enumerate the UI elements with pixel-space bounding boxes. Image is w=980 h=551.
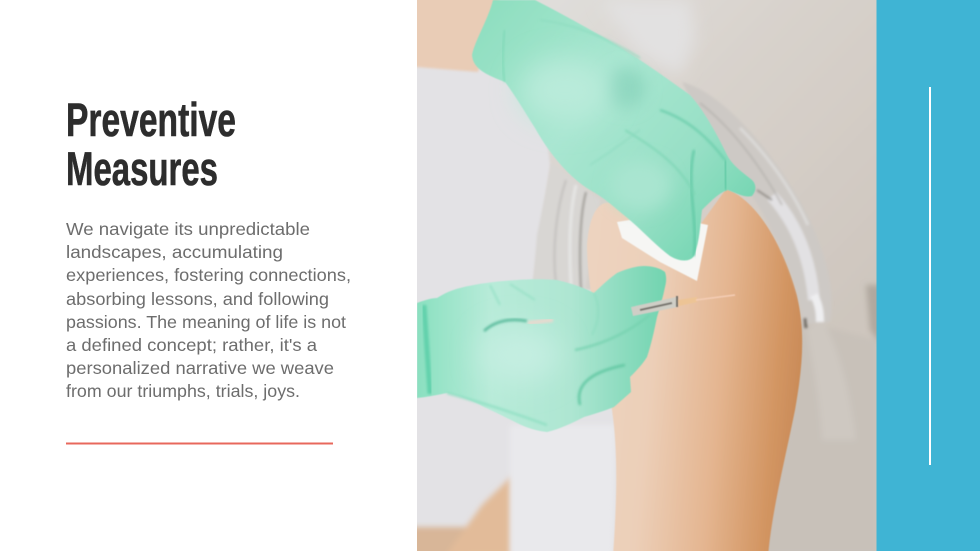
body paragraph: personalized narrative we weave <box>66 358 334 378</box>
body paragraph: from our triumphs, trials, joys. <box>66 381 300 401</box>
body paragraph: absorbing lessons, and following <box>66 289 329 309</box>
photo: sleeve left folds <box>536 180 588 288</box>
blue side panel <box>876 0 980 551</box>
title line 2: Measures <box>66 142 218 195</box>
photo: lower glove <box>417 266 666 432</box>
body paragraph: landscapes, accumulating <box>66 242 283 262</box>
photo: wall background <box>417 0 616 551</box>
title <box>66 93 236 195</box>
body paragraph: a defined concept; rather, it's a <box>66 335 317 355</box>
photo: gown light folds <box>616 2 694 70</box>
photo: upper glove <box>472 0 755 260</box>
body paragraph: We navigate its unpredictable <box>66 219 310 239</box>
photo: gown <box>530 0 882 551</box>
body paragraph <box>66 219 351 401</box>
title line 1: Preventive <box>66 93 236 146</box>
photo: nurse forearm <box>410 0 500 72</box>
photo: sleeve cuff <box>682 82 832 328</box>
photo: white lower garment <box>506 472 518 551</box>
body paragraph: experiences, fostering connections, <box>66 265 351 285</box>
photo: gloved hands giving an injection <box>410 0 882 551</box>
photo: cotton swab <box>617 215 708 281</box>
body paragraph: passions. The meaning of life is not <box>66 312 346 332</box>
photo: syringe <box>631 295 735 316</box>
photo: floor and lower arm <box>410 476 512 551</box>
white vertical line <box>929 87 931 465</box>
red divider line <box>66 442 333 444</box>
photo: arm <box>587 189 802 551</box>
photo: lower right gown <box>864 283 876 342</box>
